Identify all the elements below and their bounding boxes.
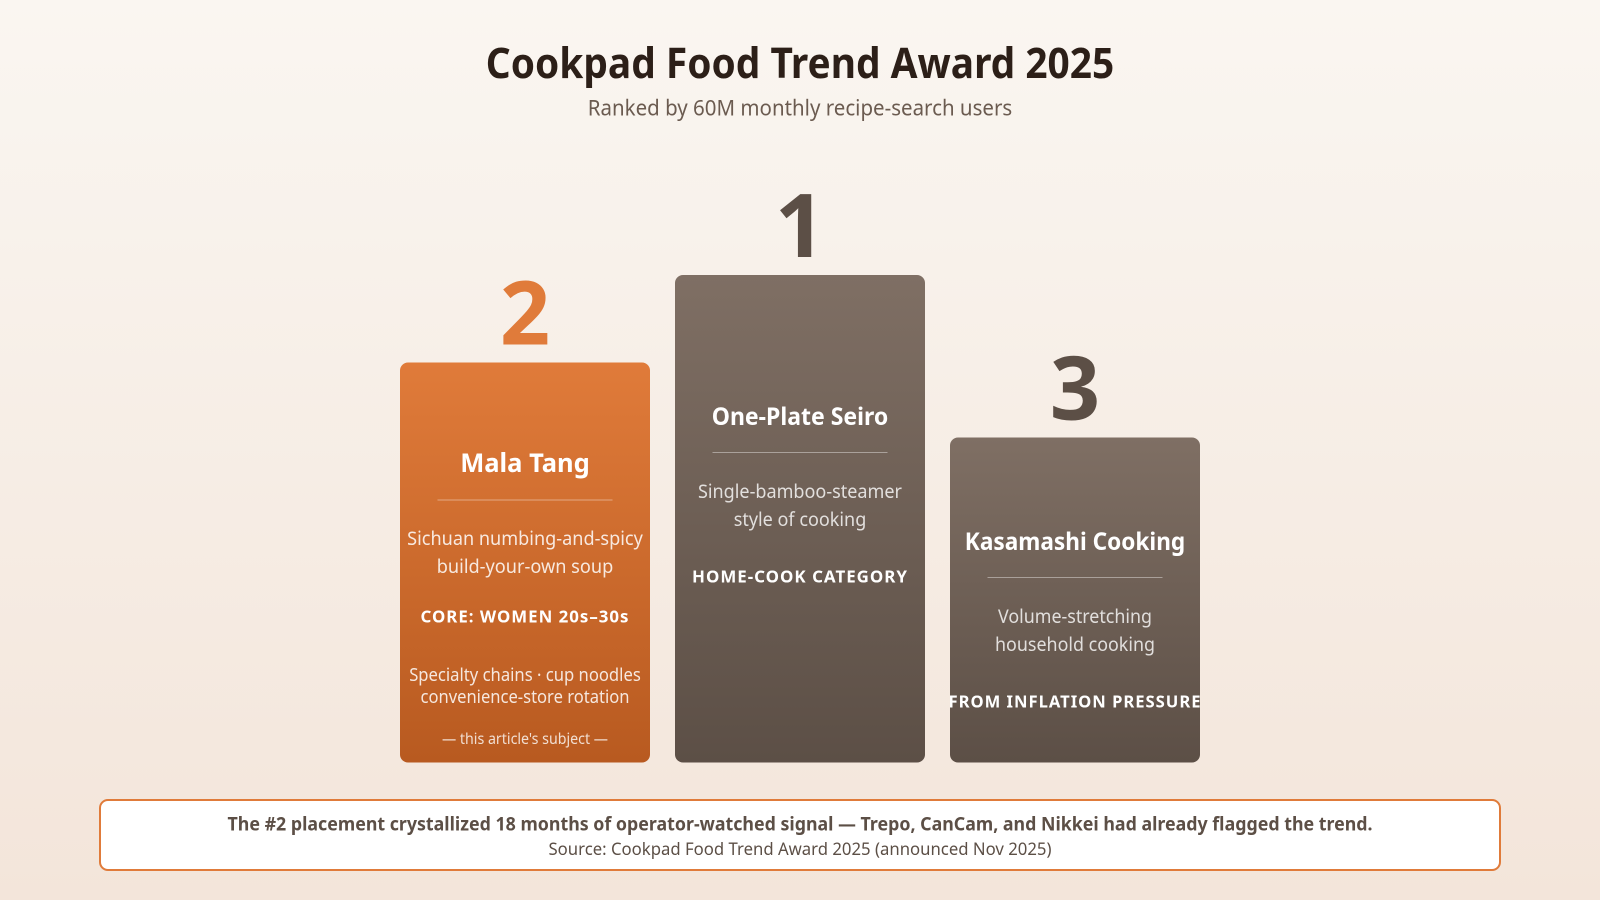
subject note: — this article's subject — bbox=[442, 729, 608, 749]
description: Single-bamboo-steamer bbox=[698, 478, 902, 504]
tag: FROM INFLATION PRESSURE bbox=[948, 690, 1202, 712]
tag: HOME-COOK CATEGORY bbox=[692, 564, 908, 588]
callout bbox=[100, 800, 1500, 870]
name: One-Plate Seiro bbox=[712, 400, 888, 433]
rank number 2: 2 bbox=[500, 250, 550, 370]
subtitle: Ranked by 60M monthly recipe-search users bbox=[588, 92, 1012, 122]
description: style of cooking bbox=[734, 506, 866, 532]
podium: third place, Kasamashi Cooking bbox=[948, 326, 1202, 762]
channels: Specialty chains · cup noodles bbox=[409, 663, 641, 687]
callout message: The #2 placement crystallized 18 months of operator-watched signal — Trepo, CanCam, and Nikkei had already flagged the trend. bbox=[228, 810, 1372, 836]
channels bbox=[409, 663, 641, 709]
name: Kasamashi Cooking bbox=[965, 525, 1185, 558]
bar 3 bbox=[950, 438, 1200, 762]
bar 2 bbox=[400, 362, 650, 762]
podium: first place, One-Plate Seiro bbox=[675, 163, 925, 762]
description: Volume-stretching bbox=[998, 603, 1152, 629]
description: build-your-own soup bbox=[437, 553, 613, 579]
description: Sichuan numbing-and-spicy bbox=[407, 525, 643, 551]
rank number 3: 3 bbox=[1050, 326, 1100, 446]
description bbox=[698, 478, 902, 532]
rank number 1: 1 bbox=[775, 163, 825, 283]
source: Source: Cookpad Food Trend Award 2025 (announced Nov 2025) bbox=[548, 837, 1052, 860]
name: Mala Tang bbox=[460, 444, 590, 480]
channels: convenience-store rotation bbox=[420, 685, 630, 709]
tag: CORE: WOMEN 20s–30s bbox=[420, 604, 630, 628]
title: Cookpad Food Trend Award 2025 bbox=[486, 34, 1114, 91]
description: household cooking bbox=[995, 631, 1155, 657]
bar 1 bbox=[675, 275, 925, 762]
description bbox=[995, 603, 1155, 657]
podium: second place, Mala Tang bbox=[400, 250, 650, 762]
description bbox=[407, 525, 643, 579]
